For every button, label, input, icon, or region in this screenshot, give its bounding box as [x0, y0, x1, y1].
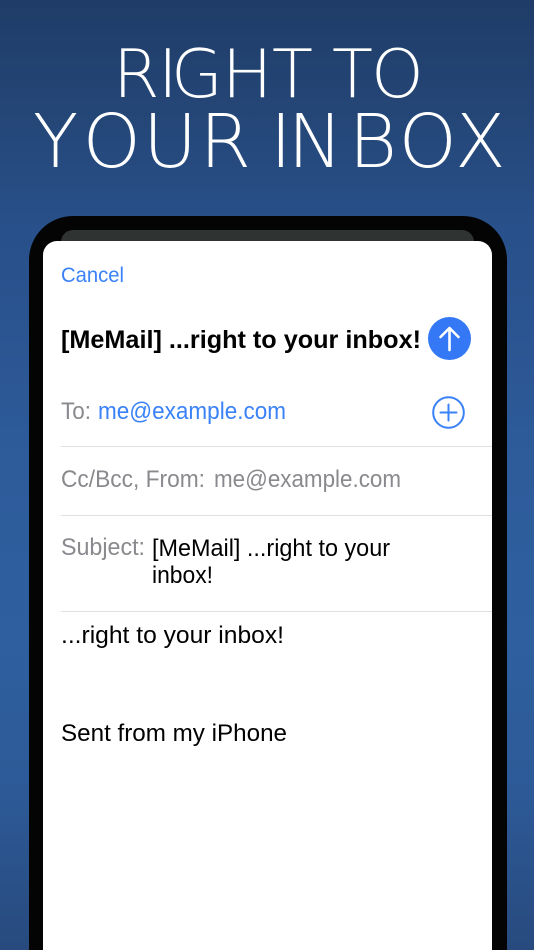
to label: To: — [61, 398, 91, 425]
subject value: [MeMail] ...right to your — [152, 535, 390, 562]
from address: me@example.com — [214, 466, 401, 493]
message body: ...right to your inbox! — [61, 622, 284, 649]
title: RIGHT TO — [113, 35, 424, 113]
title — [33, 35, 506, 185]
signature: Sent from my iPhone — [61, 720, 287, 747]
title: YOUR INBOX — [33, 99, 506, 185]
subject label: Subject: — [61, 534, 145, 561]
to address: me@example.com — [98, 398, 286, 425]
email subject heading: [MeMail] ...right to your inbox! — [61, 326, 421, 354]
mail compose screen — [43, 241, 492, 950]
cancel button: Cancel — [61, 263, 124, 287]
subject value — [152, 535, 390, 589]
phone frame — [29, 216, 507, 950]
cc/bcc label: Cc/Bcc, From: — [61, 466, 205, 493]
icon: add recipient — [433, 397, 464, 428]
notch bar — [61, 230, 474, 242]
icon: send arrow — [428, 317, 471, 360]
subject value: inbox! — [152, 562, 213, 589]
